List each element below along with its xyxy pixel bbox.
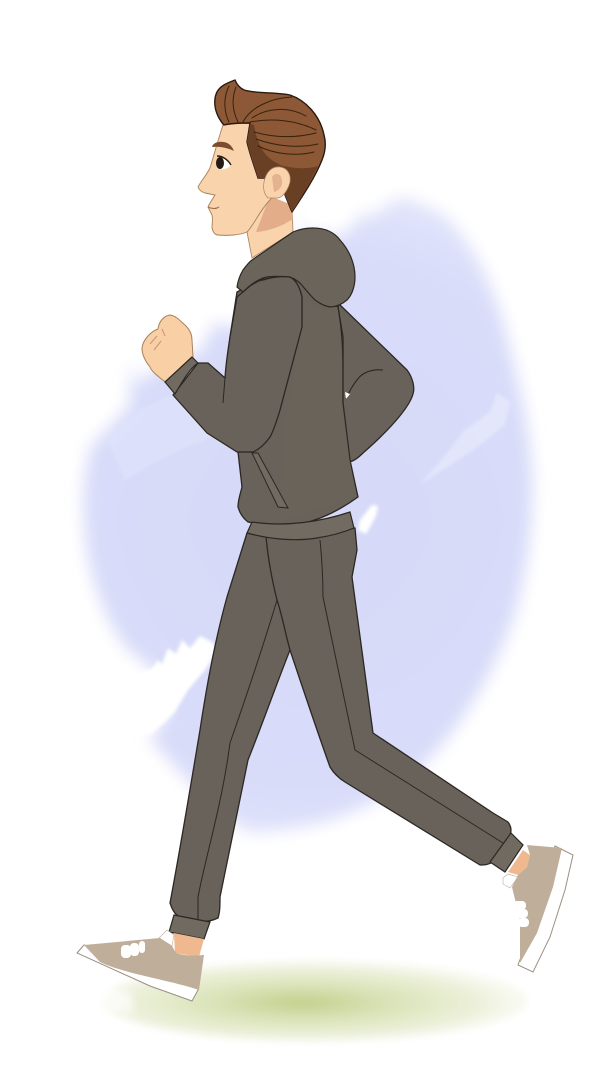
pocket xyxy=(252,453,288,508)
sole xyxy=(77,945,198,1001)
ground shadow xyxy=(96,961,527,1041)
hair xyxy=(215,80,325,212)
near leg xyxy=(169,533,300,939)
waistband xyxy=(247,512,354,540)
upper xyxy=(84,938,204,990)
light fold on hoodie xyxy=(280,307,355,522)
near arm with fist xyxy=(142,277,302,452)
sleeve xyxy=(173,277,302,452)
ankle xyxy=(174,933,204,957)
cuff xyxy=(490,833,523,872)
sole xyxy=(518,846,573,972)
neck xyxy=(247,196,293,258)
cuff xyxy=(165,357,198,394)
background: blue watercolor wash xyxy=(83,197,532,832)
cuff xyxy=(169,915,210,939)
rear shoe xyxy=(503,845,573,972)
upper xyxy=(512,845,562,963)
ear xyxy=(264,167,290,198)
fist xyxy=(142,315,193,382)
far arm xyxy=(335,303,414,462)
front shoe xyxy=(77,930,204,1001)
far leg xyxy=(266,528,523,872)
eyebrow xyxy=(212,142,234,151)
laces xyxy=(121,941,145,958)
laces xyxy=(513,901,529,927)
darker hair shading xyxy=(247,124,318,212)
white inner shirt xyxy=(233,295,240,330)
eye xyxy=(216,156,231,169)
hood xyxy=(237,228,355,372)
white tongue xyxy=(159,930,174,946)
head and face xyxy=(198,120,290,235)
mouth xyxy=(208,207,219,208)
hoodie body xyxy=(226,270,358,540)
ankle xyxy=(508,850,530,875)
white tongue xyxy=(503,874,518,888)
